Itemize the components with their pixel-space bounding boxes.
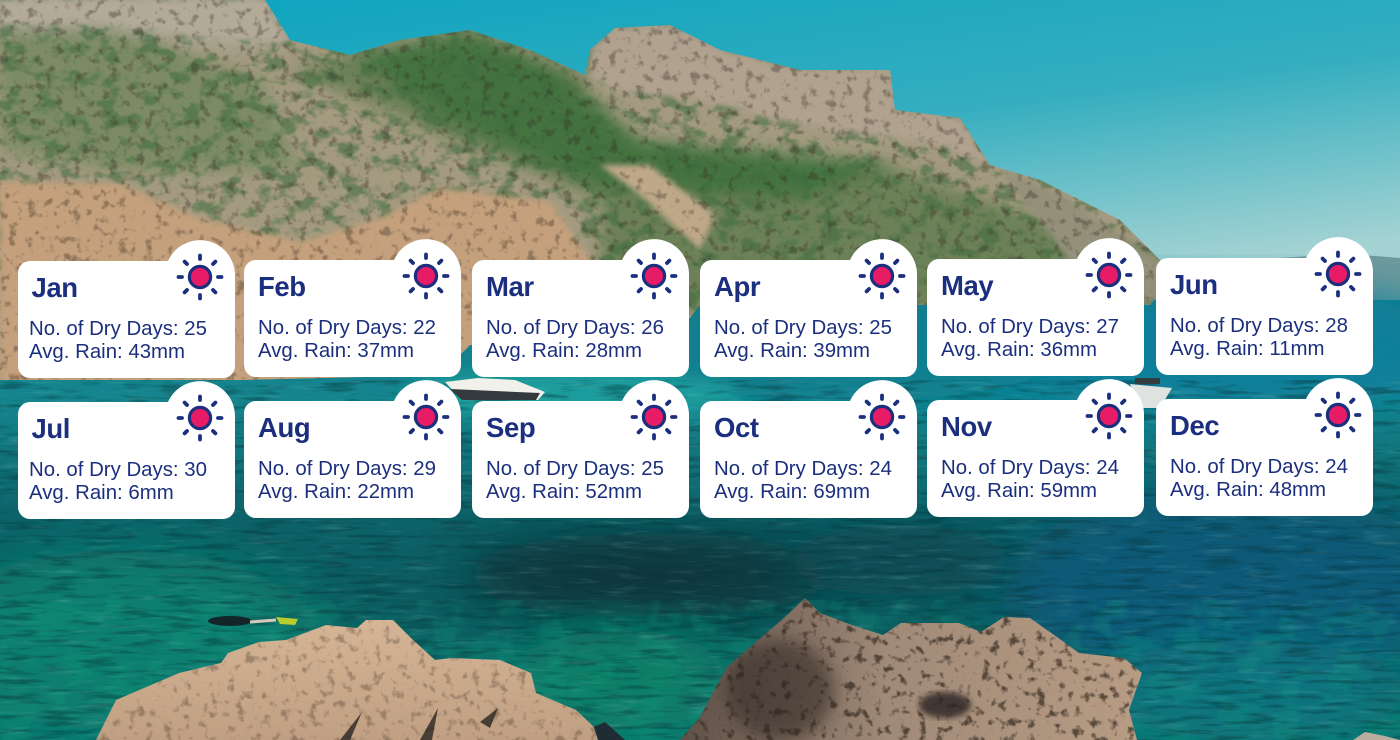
card: November (927, 379, 1144, 517)
month: Oct: Oct (714, 412, 759, 443)
month: May: May (941, 270, 994, 301)
dry days: Jul: No. of Dry Days: 30 (29, 459, 207, 481)
rainfall: Aug: Avg. Rain: 22mm (258, 481, 414, 503)
icon: sun (404, 254, 448, 298)
dry days: Dec: No. of Dry Days: 24 (1170, 456, 1348, 478)
card: December (1156, 378, 1373, 516)
dry days: Mar: No. of Dry Days: 26 (486, 317, 664, 339)
rainfall: Oct: Avg. Rain: 69mm (714, 481, 870, 503)
icon: sun (1088, 394, 1130, 438)
card: June (1156, 237, 1373, 375)
rainfall: May: Avg. Rain: 36mm (941, 339, 1097, 361)
month: Feb: Feb (258, 271, 306, 302)
rainfall: Dec: Avg. Rain: 48mm (1170, 479, 1326, 501)
rock: left foreground (90, 610, 625, 740)
card: March (472, 239, 689, 377)
card: September (472, 380, 689, 518)
icon: sun (1088, 254, 1130, 296)
icon: sun (632, 254, 676, 298)
card: April (700, 239, 917, 377)
icon: sun (860, 254, 904, 298)
month: Aug: Aug (258, 412, 310, 443)
background: distant headland (1280, 254, 1400, 300)
rainfall: Mar: Avg. Rain: 28mm (486, 340, 642, 362)
card: February (244, 239, 461, 377)
month: Dec: Dec (1170, 410, 1219, 441)
swimmer (208, 616, 298, 626)
background: sky (0, 0, 1400, 320)
month: Apr: Apr (714, 271, 761, 302)
background: wooded headland (0, 0, 1200, 400)
rainfall: Apr: Avg. Rain: 39mm (714, 340, 870, 362)
boat: right (1130, 378, 1172, 408)
month: Jul: Jul (32, 413, 70, 444)
card: August (244, 380, 461, 518)
rainfall: Nov: Avg. Rain: 59mm (941, 480, 1097, 502)
dry days: Sep: No. of Dry Days: 25 (486, 458, 664, 480)
background: sea (0, 290, 1400, 740)
rainfall: Sep: Avg. Rain: 52mm (486, 481, 642, 503)
dry days: Feb: No. of Dry Days: 22 (258, 317, 436, 339)
icon: sun (860, 396, 904, 438)
month: Nov: Nov (941, 411, 993, 442)
dry days: Jan: No. of Dry Days: 25 (29, 318, 207, 340)
month: Jun: Jun (1170, 269, 1218, 300)
month: Sep: Sep (486, 412, 535, 443)
card: May (927, 238, 1144, 376)
rainfall: Jan: Avg. Rain: 43mm (29, 341, 185, 363)
dry days: Jun: No. of Dry Days: 28 (1170, 315, 1348, 337)
icon: sun (178, 396, 222, 440)
card: October (700, 380, 917, 518)
card: January (18, 240, 235, 378)
dry days: Nov: No. of Dry Days: 24 (941, 457, 1119, 479)
rainfall: Jul: Avg. Rain: 6mm (29, 482, 174, 504)
month: Mar: Mar (486, 271, 534, 302)
month: Jan: Jan (32, 272, 78, 303)
dry days: May: No. of Dry Days: 27 (941, 316, 1119, 338)
icon: sun (404, 396, 448, 438)
rainfall: Jun: Avg. Rain: 11mm (1170, 338, 1325, 360)
rock: bottom right corner (1353, 732, 1400, 740)
icon: sun (1316, 252, 1360, 296)
rock: right foreground (670, 590, 1150, 740)
card: July (18, 381, 235, 519)
dry days: Apr: No. of Dry Days: 25 (714, 317, 892, 339)
icon: sun (178, 256, 222, 298)
icon: sun (632, 396, 676, 438)
rainfall: Feb: Avg. Rain: 37mm (258, 340, 414, 362)
icon: sun (1316, 394, 1360, 436)
dry days: Oct: No. of Dry Days: 24 (714, 458, 892, 480)
dry days: Aug: No. of Dry Days: 29 (258, 458, 436, 480)
boat: left (445, 378, 545, 400)
